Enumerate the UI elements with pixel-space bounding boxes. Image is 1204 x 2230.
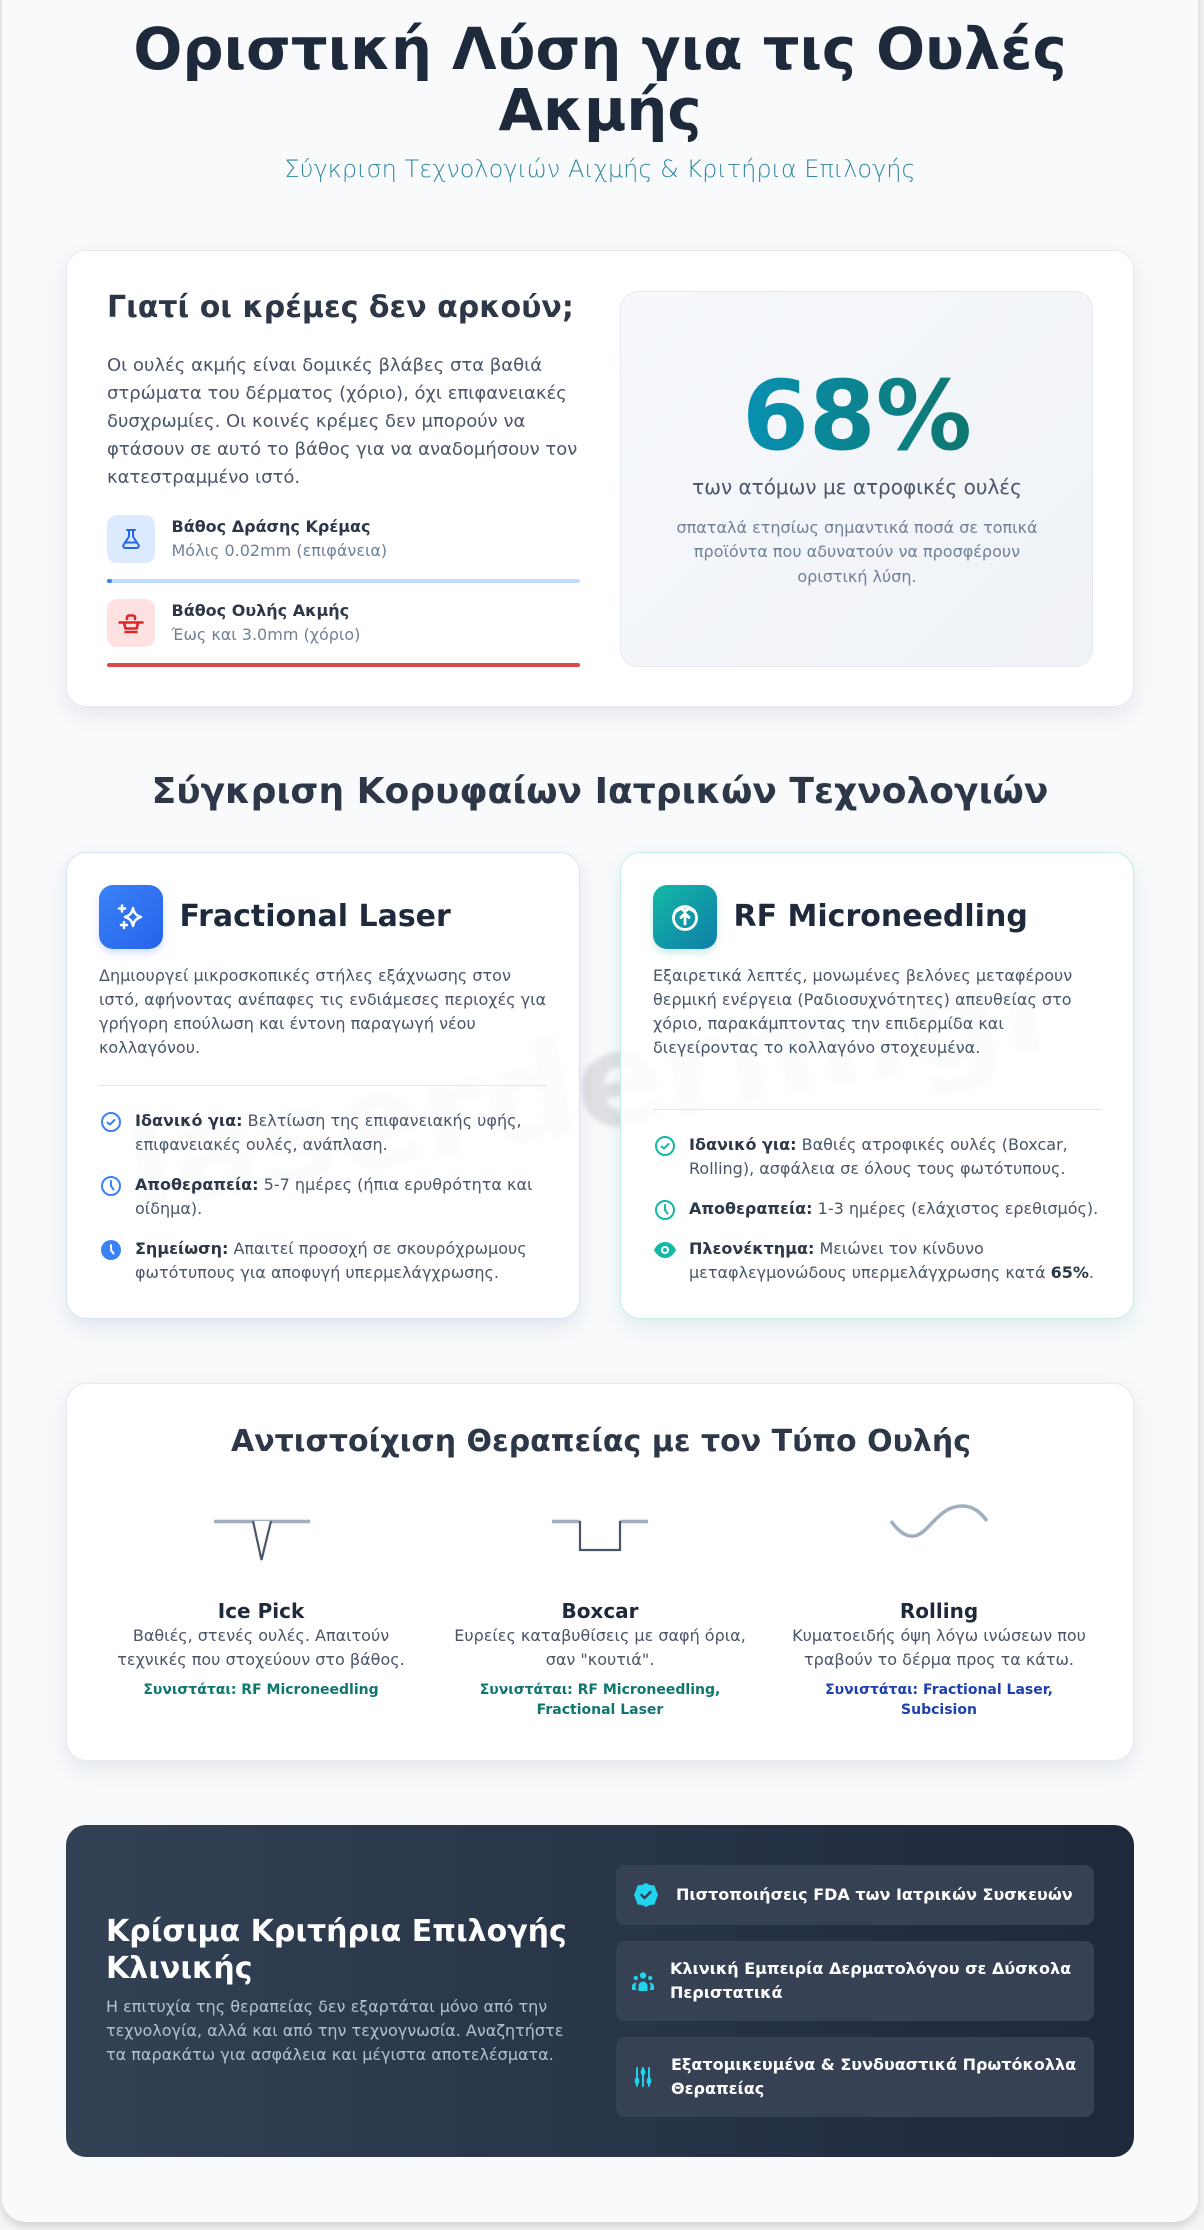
bar: scar depth [107, 663, 580, 667]
title [133, 16, 1067, 144]
text block: laser description: γρήγορη επούλωση και έντονη παραγωγή νέου [99, 1014, 476, 1033]
text block: rf description: χόριο, παρακάμπτοντας την επιδερμίδα και [653, 1014, 1004, 1033]
icon: sliders [634, 2067, 652, 2087]
text: boxcar description [454, 1626, 746, 1669]
stat panel [620, 291, 1093, 667]
recommendation: ice pick: Συνιστάται: RF Microneedling [143, 1682, 379, 1698]
text block: laser description: Δημιουργεί μικροσκοπικές στήλες εξάχνωσης στον [99, 966, 511, 985]
text block: laser description: κολλαγόνου. [99, 1038, 200, 1057]
section heading: Σύγκριση Κορυφαίων Ιατρικών Τεχνολογιών [152, 771, 1048, 812]
label: scar depth: Βάθος Ουλής Ακμής [172, 601, 349, 620]
text block: explanation: κατεστραμμένο ιστό. [107, 467, 300, 488]
text: boxcar description: σαν "κουτιά". [546, 1650, 654, 1669]
stat description: σπαταλά ετησίως σημαντικά ποσά σε τοπικά [676, 518, 1038, 537]
icon: check circle [101, 1112, 121, 1132]
panel: treatment matching [66, 1383, 1134, 1761]
text: rolling description: τραβούν το δέρμα προς τα κάτω. [804, 1650, 1074, 1669]
title: Οριστική Λύση για τις Ουλές [133, 16, 1067, 83]
text: cream depth value: Μόλις 0.02mm (επιφάνεια) [172, 541, 387, 560]
list item: advantage: μεταφλεγμονώδους υπερμελάγχρωσης κατά 65%. [689, 1263, 1094, 1282]
text: protocols: Θεραπείας [671, 2079, 764, 2098]
stat description: προϊόντα που αδυνατούν να προσφέρουν [694, 542, 1020, 561]
list item: note: φωτότυπους για αποφυγή υπερμελάγχρωσης. [135, 1263, 499, 1282]
text block: rf description: θερμική ενέργεια (Ραδιοσυχνότητες) απευθείας στο [653, 990, 1072, 1009]
label: boxcar: Boxcar [561, 1599, 639, 1623]
list item: recovery: Αποθεραπεία: 5-7 ημέρες (ήπια ερυθρότητα και [135, 1175, 532, 1194]
stat description [676, 518, 1038, 586]
label: cream depth: Βάθος Δράσης Κρέμας [172, 517, 370, 536]
icon: badge check [634, 1883, 658, 1907]
text block: rf description [653, 966, 1072, 1057]
list item: ideal for: επιφανειακές ουλές, ανάπλαση. [135, 1135, 388, 1154]
icon: flask [107, 515, 155, 563]
label: rolling: Rolling [900, 1599, 978, 1623]
recommendation: boxcar: Συνιστάται: RF Microneedling, [480, 1682, 720, 1698]
text block: explanation: φτάσουν σε αυτό το βάθος για να αναδομήσουν τον [107, 439, 577, 460]
list item: note [135, 1239, 527, 1282]
icon: users [632, 1972, 654, 1991]
panel: clinic selection criteria [66, 1825, 1134, 2157]
bar: cream depth [107, 579, 580, 583]
text: experience [670, 1959, 1071, 2002]
list item: advantage: Πλεονέκτημα: Μειώνει τον κίνδυνο [689, 1239, 984, 1258]
text block: explanation [107, 355, 577, 488]
text: scar depth value: Έως και 3.0mm (χόριο) [172, 625, 360, 644]
text block: rf description: διεγείροντας το κολλαγόνο στοχευμένα. [653, 1038, 980, 1057]
text block: laser description: ιστό, αφήνοντας ανέπαφες τις ενδιάμεσες περιοχές για [99, 990, 546, 1009]
text block: explanation: στρώματα του δέρματος (χόριο), όχι επιφανειακές [107, 383, 567, 404]
heading: rf microneedling: RF Microneedling [734, 899, 1028, 934]
text: experience: Περιστατικά [670, 1983, 782, 2002]
title: Ακμής [498, 77, 702, 144]
text: ice pick description: Βαθιές, στενές ουλές. Απαιτούν [133, 1626, 389, 1645]
icon: clock [101, 1176, 121, 1196]
text: protocols: Εξατομικευμένα & Συνδυαστικά Πρωτόκολλα [671, 2055, 1076, 2074]
list item: ideal for [689, 1135, 1068, 1178]
stat label: των ατόμων με ατροφικές ουλές [692, 475, 1022, 499]
text block: criteria intro: τα παρακάτω για ασφάλεια και μέγιστα αποτελέσματα. [106, 2045, 554, 2064]
criterion: fda certifications [616, 1865, 1094, 1925]
heading: fractional laser: Fractional Laser [180, 899, 451, 934]
panel: why creams are not enough [66, 250, 1134, 707]
icon: eye [654, 1242, 676, 1258]
text: ice pick description [117, 1626, 405, 1669]
icon: check circle [655, 1136, 675, 1156]
icon: clock [655, 1200, 675, 1220]
list item: recovery: Αποθεραπεία: 1-3 ημέρες (ελάχιστος ερεθισμός). [689, 1199, 1098, 1218]
icon: ice pick diagram [214, 1520, 310, 1560]
stat: 68%: 68% [742, 360, 972, 472]
list item: ideal for: Ιδανικό για: Βαθιές ατροφικές ουλές (Boxcar, [689, 1135, 1068, 1154]
text block: explanation: δυσχρωμίες. Οι κοινές κρέμες δεν μπορούν να [107, 411, 525, 432]
icon: sparkles [99, 885, 163, 949]
text: rolling description [792, 1626, 1086, 1669]
text block: laser description [99, 966, 546, 1057]
text block: criteria intro: Η επιτυχία της θεραπείας δεν εξαρτάται μόνο από την [106, 1997, 547, 2016]
list item: recovery: οίδημα). [135, 1199, 202, 1218]
subtitle: Σύγκριση Τεχνολογιών Αιχμής & Κριτήρια Επιλογής [284, 155, 916, 183]
list item: note: Σημείωση: Απαιτεί προσοχή σε σκουρόχρωμους [135, 1239, 527, 1258]
panel: fractional laser [66, 852, 580, 1319]
list item: recovery [135, 1175, 532, 1218]
watermark: laserderm.gr [114, 927, 1075, 1241]
heading: criteria [106, 1914, 567, 1986]
recommendation: rolling: Συνιστάται: Fractional Laser, [825, 1682, 1053, 1698]
icon: scar depth [107, 599, 155, 647]
list item: advantage [689, 1239, 1094, 1282]
text: fda: Πιστοποιήσεις FDA των Ιατρικών Συσκευών [676, 1885, 1073, 1904]
list item: ideal for: Rolling), ασφάλεια σε όλους τους φωτότυπους. [689, 1159, 1065, 1178]
recommendation: boxcar: Fractional Laser [537, 1702, 663, 1718]
heading: treatment matching: Αντιστοίχιση Θεραπείας με τον Τύπο Ουλής [231, 1424, 971, 1459]
text: protocols [671, 2055, 1076, 2098]
icon: boxcar diagram [552, 1520, 648, 1552]
text block: explanation: Οι ουλές ακμής είναι δομικές βλάβες στα βαθιά [107, 355, 542, 376]
text: rolling description: Κυματοειδής όψη λόγω ινώσεων που [792, 1626, 1086, 1645]
criterion: personalized protocols [616, 2037, 1094, 2117]
recommendation: rolling: Subcision [901, 1702, 977, 1718]
list item: ideal for: Ιδανικό για: Βελτίωση της επιφανειακής υφής, [135, 1111, 522, 1130]
heading: why creams: Γιατί οι κρέμες δεν αρκούν; [107, 290, 574, 325]
text: ice pick description: τεχνικές που στοχεύουν στο βάθος. [117, 1650, 405, 1669]
heading: criteria: Κλινικής [106, 1951, 252, 1986]
panel: rf microneedling [620, 852, 1134, 1319]
text: boxcar description: Ευρείες καταβυθίσεις με σαφή όρια, [454, 1626, 746, 1645]
text: experience: Κλινική Εμπειρία Δερματολόγου σε Δύσκολα [670, 1959, 1071, 1978]
icon: rf gauge [653, 885, 717, 949]
list item: ideal for [135, 1111, 522, 1154]
icon: filled clock [101, 1240, 121, 1260]
recommendation: rolling [825, 1682, 1053, 1718]
text block: criteria intro: τεχνολογία, αλλά και από την τεχνογνωσία. Αναζητήστε [106, 2021, 563, 2040]
heading: criteria: Κρίσιμα Κριτήρια Επιλογής [106, 1914, 567, 1949]
icon: rolling diagram [890, 1504, 988, 1538]
criterion: dermatologist experience [616, 1941, 1094, 2021]
stat description: οριστική λύση. [797, 567, 917, 586]
label: ice pick: Ice Pick [218, 1599, 304, 1623]
recommendation: boxcar [480, 1682, 720, 1718]
text block: rf description: Εξαιρετικά λεπτές, μονωμένες βελόνες μεταφέρουν [653, 966, 1072, 985]
text block: criteria intro [106, 1997, 563, 2064]
